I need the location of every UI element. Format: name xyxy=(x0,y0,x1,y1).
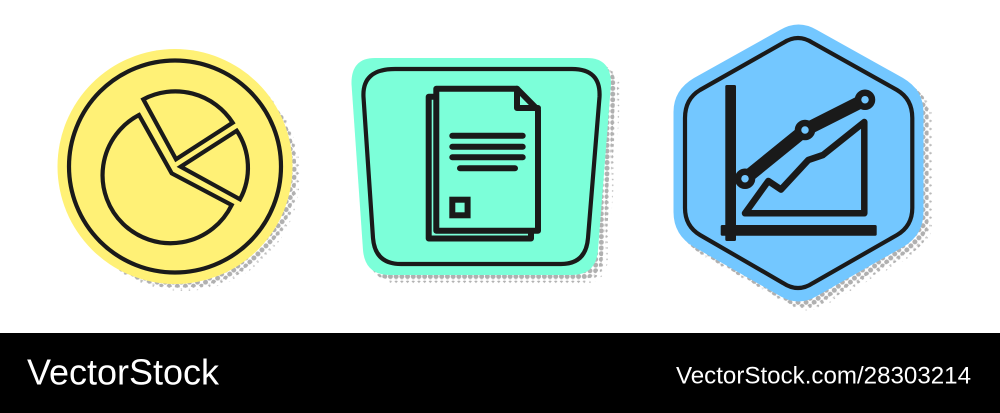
teal shape background xyxy=(351,58,611,275)
icon: pie chart xyxy=(103,91,248,243)
icon: documents xyxy=(429,89,538,238)
icon: axes and line chart xyxy=(721,85,877,241)
blue hexagon background xyxy=(674,24,924,302)
halftone shadow: pie badge xyxy=(119,96,300,291)
panel: document badge xyxy=(352,58,620,283)
brand wordmark: VectorStock xyxy=(27,352,220,392)
teal shape outline xyxy=(363,69,600,264)
circle outline xyxy=(69,60,281,272)
image id: VectorStock.com/28303214 xyxy=(676,362,971,390)
footer band xyxy=(0,333,1000,413)
panel: line chart badge xyxy=(674,24,940,325)
yellow circle background xyxy=(58,49,292,284)
halftone shadow: document badge xyxy=(372,66,620,283)
hexagon outline xyxy=(685,38,912,288)
halftone shadow: chart badge xyxy=(687,88,932,310)
panel: pie chart badge xyxy=(58,49,300,291)
